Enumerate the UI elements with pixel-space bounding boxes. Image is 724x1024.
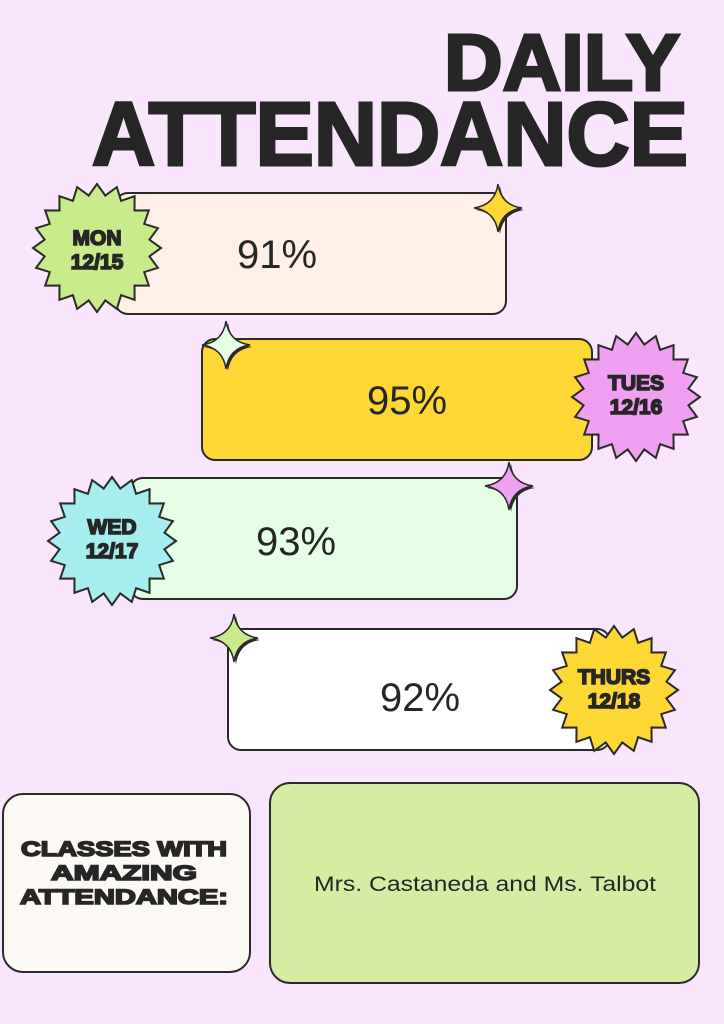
bar: thursday: [228, 629, 610, 750]
bar: monday: [115, 193, 506, 314]
icon: sparkle pink: [485, 462, 535, 512]
badge: mon 12/15: 12/15: [71, 251, 124, 274]
panel: classes label: AMAZING: [51, 862, 197, 885]
title: ATTENDANCE: [92, 85, 688, 185]
icon: sparkle yellow: [474, 184, 524, 234]
panel: classes label: [3, 794, 250, 972]
panel: classes label: CLASSES WITH: [21, 838, 227, 861]
badge: mon 12/15: [33, 184, 161, 312]
value: 92%: 92%: [380, 676, 460, 720]
badge: tues 12/16: TUES: [608, 372, 664, 395]
bar: tuesday: [202, 339, 592, 460]
badge: thurs 12/18: THURS: [578, 666, 650, 689]
value: 91%: 91%: [237, 233, 317, 277]
bar: wednesday: [130, 478, 517, 599]
title: DAILY: [444, 18, 680, 107]
badge: tues 12/16: 12/16: [610, 396, 662, 419]
badge: mon 12/15: MON: [72, 227, 122, 250]
icon: sparkle mint: [202, 321, 252, 371]
badge: tues 12/16: [572, 333, 700, 461]
panel: classes names: [270, 783, 699, 983]
badge: thurs 12/18: 12/18: [588, 690, 641, 713]
badge: wed 12/17: WED: [88, 516, 136, 539]
badge: wed 12/17: 12/17: [86, 540, 138, 563]
panel: classes names: Mrs. Castaneda and Ms. Talbot: [314, 873, 656, 896]
value: 93%: 93%: [256, 520, 336, 564]
badge: thurs 12/18: [550, 626, 678, 754]
badge: wed 12/17: [48, 477, 176, 605]
title: [92, 18, 688, 185]
value: 95%: 95%: [367, 379, 447, 423]
icon: sparkle green: [210, 614, 260, 664]
panel: classes label: ATTENDANCE:: [20, 886, 228, 909]
